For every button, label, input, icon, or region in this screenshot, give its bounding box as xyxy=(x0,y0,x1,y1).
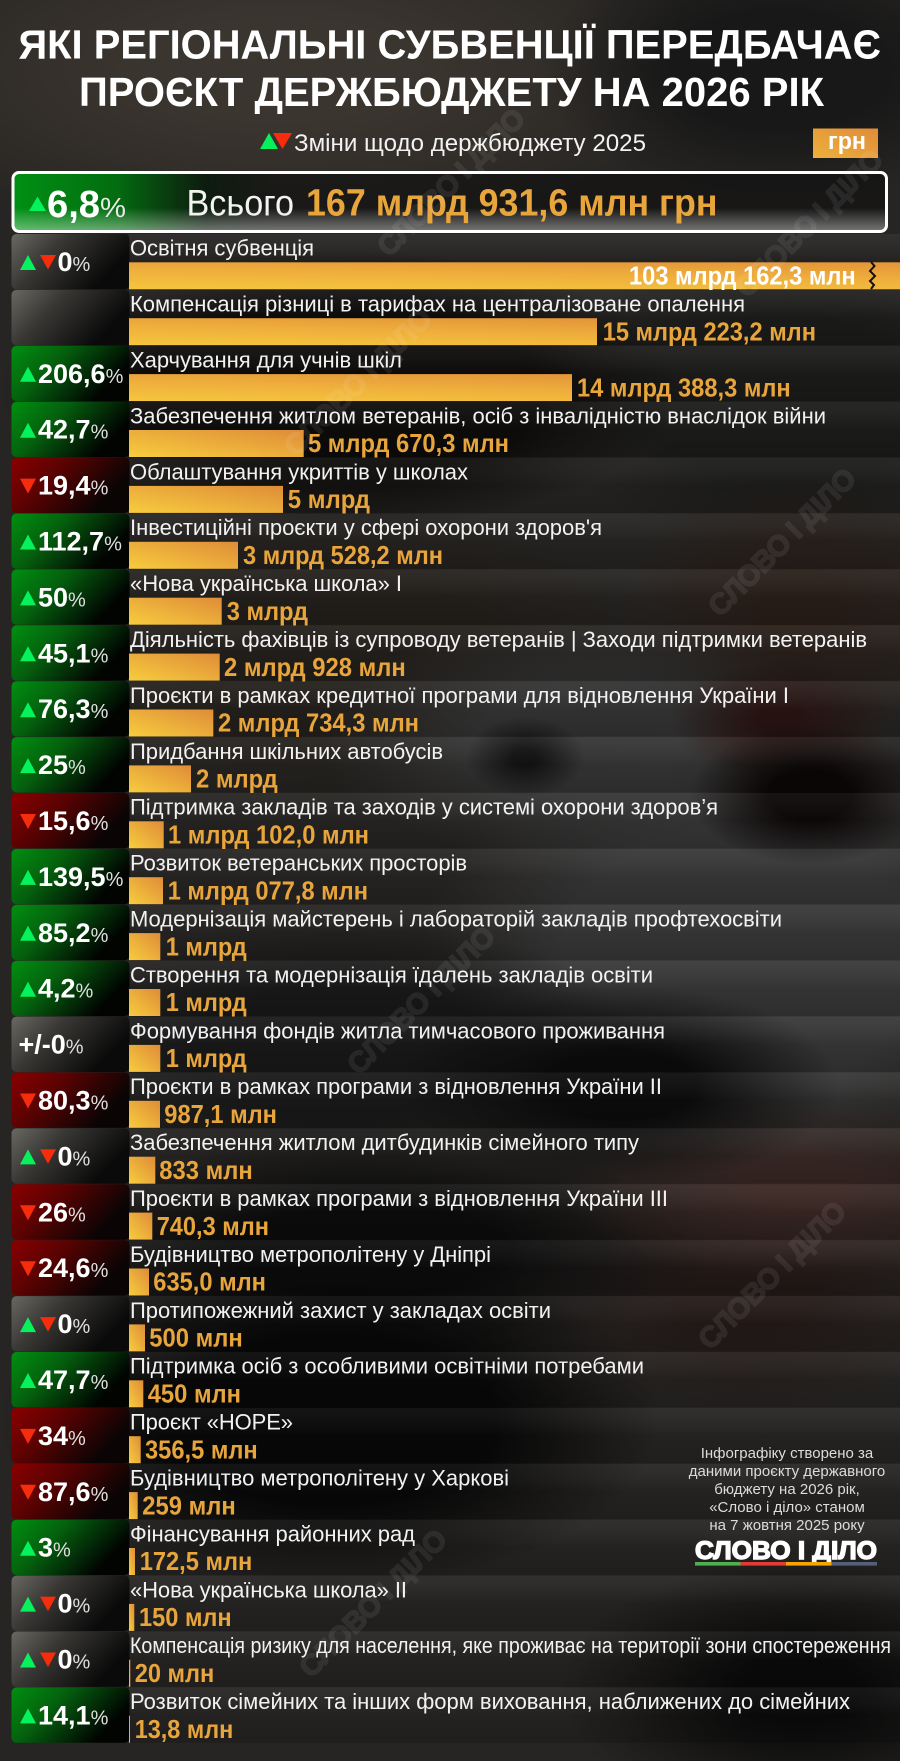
label: Проєкти в рамках програми з відновлення України ІІ xyxy=(130,1074,662,1099)
change badge xyxy=(12,514,130,569)
total panel: Всього xyxy=(186,182,294,224)
change badge xyxy=(12,1296,130,1352)
change badge xyxy=(12,1072,130,1128)
label: Освітня субвенція xyxy=(130,236,314,261)
label: Протипожежний захист у закладах освіти xyxy=(130,1298,551,1323)
title: ПРОЄКТ ДЕРЖБЮДЖЕТУ НА 2026 РІК xyxy=(79,69,825,115)
source note: на 7 жовтня 2025 року xyxy=(709,1517,865,1534)
label: Підтримка закладів та заходів у системі охорони здоров’я xyxy=(130,795,718,820)
value: 172,5 млн xyxy=(140,1546,252,1576)
label: Придбання шкільних автобусів xyxy=(130,739,443,764)
label: Забезпечення житлом дитбудинків сімейного типу xyxy=(130,1130,639,1155)
value: 635,0 млн xyxy=(153,1267,266,1297)
value: 20 млн xyxy=(135,1658,214,1688)
watermarks xyxy=(278,102,890,1684)
row: Підтримка закладів охорони здоров'я xyxy=(12,793,900,850)
row: Компенсація різниці в тарифах xyxy=(12,290,900,346)
row: Проєкти кредитної програми I xyxy=(12,681,900,738)
change badge xyxy=(12,234,130,289)
row: Проєкти програми III xyxy=(12,1184,900,1241)
bar xyxy=(129,1604,134,1631)
label: Проєкти в рамках програми з відновлення України ІІІ xyxy=(130,1186,668,1211)
label: Розвиток сімейних та інших форм виховання, наближених до сімейних xyxy=(130,1689,850,1714)
change badge: 25% xyxy=(38,750,86,780)
watermarks: СЛОВО І ДІЛО xyxy=(702,462,863,623)
value: 1 млрд 102,0 млн xyxy=(168,820,369,850)
row: Особливі освітні потреби xyxy=(12,1352,900,1408)
change badge xyxy=(12,1352,130,1407)
change badge: 206,6% xyxy=(38,359,124,389)
change badge: 139,5% xyxy=(38,862,124,892)
change badge: 80,3% xyxy=(38,1086,109,1116)
change badge: 0% xyxy=(58,1644,91,1674)
change badge: 0% xyxy=(58,247,91,277)
bar xyxy=(129,486,283,513)
total panel: % xyxy=(100,192,126,223)
bar xyxy=(129,1436,141,1463)
value: 259 млн xyxy=(142,1490,236,1520)
bar xyxy=(129,542,238,569)
source note: даними проєкту державного xyxy=(689,1463,885,1480)
change badge xyxy=(12,1520,130,1575)
label: Створення та модернізація їдалень закладів освіти xyxy=(130,962,653,987)
logo: Слово і діло: СЛОВО І ДІЛО xyxy=(695,1537,877,1565)
bar xyxy=(129,1492,138,1519)
change badge: 42,7% xyxy=(38,415,109,445)
label: Проєкти в рамках кредитної програми для відновлення України І xyxy=(130,683,789,708)
bar xyxy=(129,1324,145,1351)
change badge: 87,6% xyxy=(38,1477,109,1507)
change badge xyxy=(12,402,130,457)
label: Облаштування укриттів у школах xyxy=(130,459,468,484)
change badge: 19,4% xyxy=(38,471,109,501)
label: Проєкт «HOPE» xyxy=(130,1410,293,1435)
row: Метрополітен у Харкові xyxy=(12,1464,900,1520)
label: Фінансування районних рад xyxy=(130,1521,415,1546)
change badge xyxy=(12,1632,130,1687)
row: Забезпечення житлом дитбудинків xyxy=(12,1128,900,1185)
value: 450 млн xyxy=(148,1378,241,1408)
row: Формування фондів житла xyxy=(12,1017,900,1073)
bar xyxy=(129,1268,149,1296)
source note: бюджету на 2026 рік, xyxy=(714,1481,860,1498)
change badge xyxy=(12,458,130,513)
change badge: 3% xyxy=(38,1533,71,1563)
bar xyxy=(129,765,191,792)
value: 5 млрд xyxy=(288,484,370,514)
bar xyxy=(129,1716,130,1743)
change badge xyxy=(12,346,130,401)
bar xyxy=(129,1660,130,1687)
source note xyxy=(689,1445,885,1534)
row: Придбання шкільних автобусів xyxy=(12,737,900,794)
change badge xyxy=(12,905,130,960)
row: Компенсація ризику xyxy=(12,1632,900,1688)
row: Забезпечення житлом ветеранів xyxy=(12,402,900,458)
value: 5 млрд 670,3 млн xyxy=(308,428,509,458)
row: Нова українська школа II xyxy=(12,1576,900,1632)
change badge: 34% xyxy=(38,1421,86,1451)
bar xyxy=(129,989,160,1016)
row: Метрополітен у Дніпрі xyxy=(12,1240,900,1297)
label: Будівництво метрополітену у Дніпрі xyxy=(130,1242,491,1267)
source note: «Слово і діло» станом xyxy=(709,1499,865,1516)
change badge xyxy=(12,793,130,848)
label: Формування фондів житла тимчасового проживання xyxy=(130,1018,665,1043)
row: Розвиток ветеранських просторів xyxy=(12,849,900,905)
legend: changes versus 2025 budget: Зміни щодо держбюджету 2025 xyxy=(294,130,646,157)
bar xyxy=(129,654,220,681)
change badge: 85,2% xyxy=(38,918,109,948)
value: 500 млн xyxy=(149,1323,243,1353)
change badge xyxy=(12,1687,130,1743)
change badge xyxy=(12,849,130,904)
change badge xyxy=(12,681,130,737)
value: 987,1 млн xyxy=(164,1099,277,1129)
title xyxy=(18,22,881,115)
label: Інвестиційні проєкти у сфері охорони здоров'я xyxy=(130,515,602,540)
change badge xyxy=(12,1240,130,1296)
change badge: 26% xyxy=(38,1197,86,1227)
watermarks: СЛОВО І ДІЛО xyxy=(293,1523,454,1684)
change badge: 47,7% xyxy=(38,1365,109,1395)
title: ЯКІ РЕГІОНАЛЬНІ СУБВЕНЦІЇ ПЕРЕДБАЧАЄ xyxy=(18,22,881,68)
change badge: 45,1% xyxy=(38,638,109,668)
source note: Інфографіку створено за xyxy=(701,1445,874,1462)
change badge: 0% xyxy=(58,1589,91,1619)
label: Підтримка осіб з особливими освітніми потребами xyxy=(130,1354,644,1379)
row: Освітня субвенція xyxy=(12,234,900,290)
value: 2 млрд xyxy=(196,764,278,794)
row: Інвестиційні проєкти xyxy=(12,514,900,570)
value: 1 млрд 077,8 млн xyxy=(168,875,368,905)
row: Модернізація майстерень xyxy=(12,905,900,961)
change badge: 24,6% xyxy=(38,1253,109,1283)
change badge (empty) xyxy=(12,290,130,345)
bar xyxy=(129,1045,160,1072)
row: Протипожежний захист xyxy=(12,1296,900,1353)
total panel: 167 млрд 931,6 млн грн xyxy=(306,182,718,224)
watermarks: СЛОВО І ДІЛО xyxy=(278,302,439,463)
label: «Нова українська школа» І xyxy=(130,571,402,596)
value: 103 млрд 162,3 млн xyxy=(629,260,856,290)
change badge xyxy=(12,1464,130,1519)
value: 1 млрд xyxy=(166,931,247,961)
bar xyxy=(129,1213,152,1240)
change badge xyxy=(12,1017,130,1072)
label: Розвиток ветеранських просторів xyxy=(130,851,467,876)
value: 13,8 млн xyxy=(135,1714,233,1744)
bar xyxy=(129,877,163,904)
value: 3 млрд 528,2 млн xyxy=(243,540,443,570)
label: Компенсація різниці в тарифах на централізоване опалення xyxy=(130,292,745,317)
bar xyxy=(129,1101,160,1128)
total panel: 6,8 xyxy=(47,184,100,226)
label: Забезпечення житлом ветеранів, осіб з інвалідністю внаслідок війни xyxy=(130,403,826,428)
bar xyxy=(129,933,160,960)
change badge: 15,6% xyxy=(38,806,109,836)
value: 2 млрд 928 млн xyxy=(224,652,406,682)
change badge xyxy=(12,961,130,1016)
bar xyxy=(129,1157,155,1184)
label: Модернізація майстерень і лабораторій закладів профтехосвіти xyxy=(130,906,782,931)
bar xyxy=(129,821,164,848)
change badge: +/-0% xyxy=(18,1030,84,1060)
row: Проєкт HOPE xyxy=(12,1408,900,1464)
change badge: 76,3% xyxy=(38,694,109,724)
change badge: 0% xyxy=(58,1309,91,1339)
label: Діяльність фахівців із супроводу ветеранів | Заходи підтримки ветеранів xyxy=(130,627,867,652)
change badge: 14,1% xyxy=(38,1700,109,1730)
bar xyxy=(129,1380,143,1407)
bar xyxy=(129,1548,135,1575)
bar xyxy=(129,598,222,625)
value: 356,5 млн xyxy=(145,1434,258,1464)
change badge xyxy=(12,625,130,681)
row: Проєкти програми II xyxy=(12,1072,900,1129)
change badge xyxy=(12,737,130,792)
bar xyxy=(129,374,572,401)
change badge: 0% xyxy=(58,1141,91,1171)
row: Фінансування районних рад xyxy=(12,1520,900,1576)
total panel xyxy=(13,172,886,232)
row: Діяльність фахівців xyxy=(12,625,900,682)
watermarks: СЛОВО І ДІЛО xyxy=(729,143,890,304)
watermarks: СЛОВО І ДІЛО xyxy=(341,920,502,1081)
row: Створення та модернізація їдалень xyxy=(12,961,900,1017)
value: 15 млрд 223,2 млн xyxy=(603,316,816,346)
watermarks: СЛОВО І ДІЛО xyxy=(371,102,532,263)
value: 14 млрд 388,3 млн xyxy=(577,372,791,402)
row: Харчування для учнів шкіл xyxy=(12,346,900,402)
change badge xyxy=(12,1408,130,1463)
unit badge xyxy=(813,128,878,158)
value: 833 млн xyxy=(159,1155,253,1185)
value: 740,3 млн xyxy=(157,1211,269,1241)
change badge xyxy=(12,1576,130,1631)
bar xyxy=(129,430,304,457)
label: «Нова українська школа» ІІ xyxy=(130,1577,407,1602)
change badge xyxy=(12,1128,130,1184)
bar xyxy=(129,710,213,736)
bar xyxy=(129,318,597,345)
change badge: 4,2% xyxy=(38,974,94,1004)
row: Розвиток сімейних форм виховання xyxy=(12,1687,900,1744)
change badge: 50% xyxy=(38,582,86,612)
row: Облаштування укриттів xyxy=(12,458,900,514)
value: 1 млрд xyxy=(166,1043,247,1073)
value: 1 млрд xyxy=(166,987,247,1017)
value: 150 млн xyxy=(139,1602,232,1632)
watermarks: СЛОВО І ДІЛО xyxy=(692,1195,853,1356)
label: Будівництво метрополітену у Харкові xyxy=(130,1466,509,1491)
change badge xyxy=(12,1184,130,1240)
row: Нова українська школа I xyxy=(12,569,900,626)
value: 3 млрд xyxy=(227,596,308,626)
value: 2 млрд 734,3 млн xyxy=(218,708,419,738)
label: Харчування для учнів шкіл xyxy=(130,347,402,372)
change badge: 112,7% xyxy=(38,526,122,556)
bar with scale break xyxy=(129,262,900,289)
unit badge: грн xyxy=(828,128,866,155)
change badge xyxy=(12,569,130,625)
